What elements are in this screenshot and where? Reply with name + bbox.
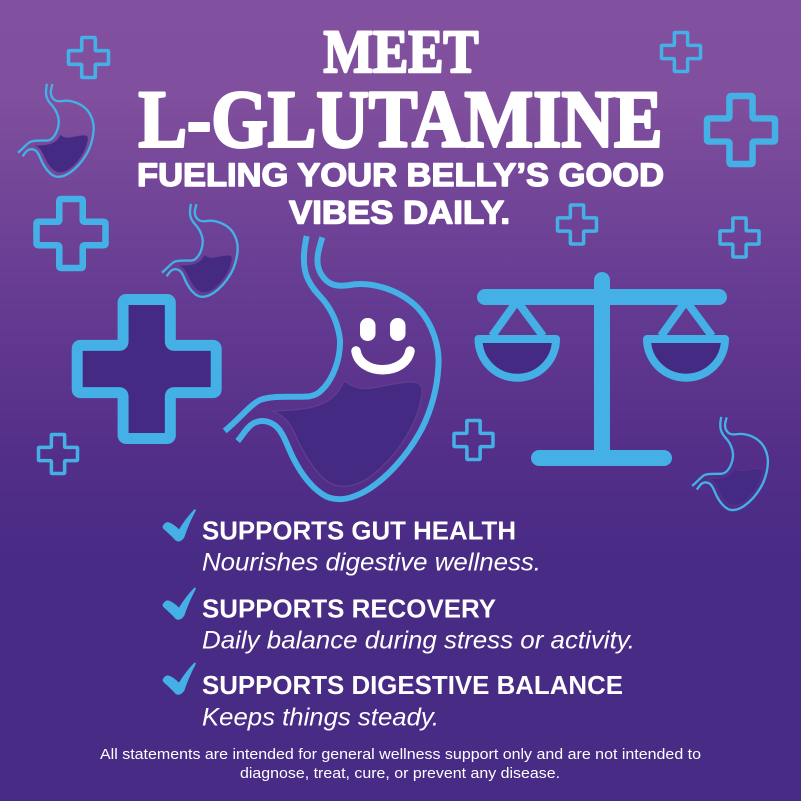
benefit: digestive balance: Keeps things steady. — [202, 704, 439, 732]
subtitle line 1: FUELING YOUR BELLY’S GOOD — [137, 157, 664, 193]
stomach: small right — [692, 417, 768, 510]
title: MEET: MEET — [324, 19, 478, 86]
cross: large — [77, 300, 216, 438]
cross: left medium — [36, 199, 106, 268]
cross: center small — [558, 205, 596, 244]
benefit: recovery — [163, 588, 635, 654]
disclaimer: All statements are intended for general wellness support only and are not intended to — [100, 746, 701, 763]
icon: smile — [356, 351, 410, 370]
icon: left eye — [360, 318, 376, 341]
disclaimer: diagnose, treat, cure, or prevent any disease. — [240, 765, 560, 782]
icon: right eye — [390, 318, 406, 341]
benefit: digestive balance: SUPPORTS DIGESTIVE BALANCE — [202, 672, 623, 700]
benefit: recovery: SUPPORTS RECOVERY — [202, 596, 496, 624]
cross: bottom left small — [38, 434, 78, 474]
icon: balance scale — [477, 272, 727, 466]
cross: top left — [68, 38, 108, 78]
disclaimer — [100, 746, 701, 782]
cross: center lower small — [454, 420, 493, 460]
icon: check mark — [163, 588, 196, 620]
icon: check mark — [163, 663, 196, 695]
cross: right medium — [707, 96, 775, 164]
subtitle line 2: VIBES DAILY. — [289, 194, 510, 230]
cross: top right small — [662, 32, 700, 72]
title: L-GLUTAMINE: L-GLUTAMINE — [138, 74, 662, 164]
benefit: recovery: Daily balance during stress or activity. — [202, 626, 635, 654]
benefit: gut health: SUPPORTS GUT HEALTH — [202, 518, 516, 546]
cross: right small — [720, 218, 759, 257]
icon: check mark — [163, 509, 196, 541]
benefit: gut health — [163, 509, 541, 576]
benefit: gut health: Nourishes digestive wellness. — [202, 548, 541, 576]
stomach: main with smiling face — [225, 236, 439, 499]
benefit: digestive balance — [163, 663, 623, 732]
stomach: small top left — [18, 84, 94, 177]
stomach: small center left — [162, 204, 238, 297]
